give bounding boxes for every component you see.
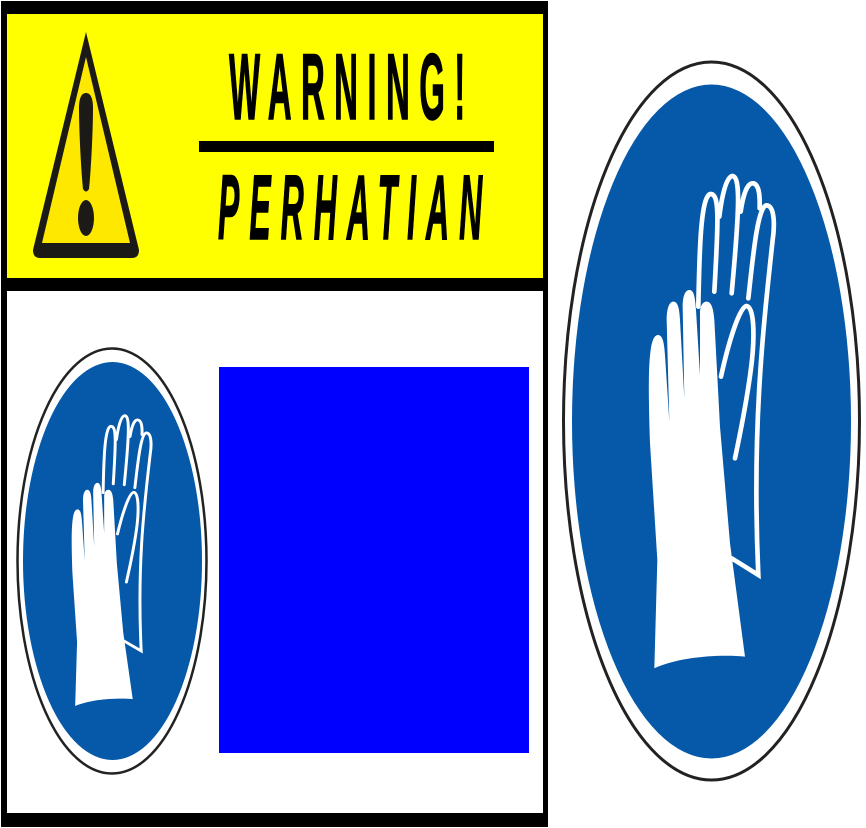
icon: small gloves sign <box>18 348 206 774</box>
icon: warning triangle <box>33 32 139 258</box>
panel: warning sign frame <box>1 1 548 827</box>
icon: large gloves sign <box>564 62 860 780</box>
blue square <box>219 367 529 753</box>
divider bar <box>199 141 494 152</box>
heading: WARNING: WARNING! <box>229 34 475 139</box>
panel: yellow warning header <box>7 14 543 278</box>
panel: white lower section <box>7 291 543 813</box>
heading: PERHATIAN: PERHATIAN <box>218 156 492 259</box>
